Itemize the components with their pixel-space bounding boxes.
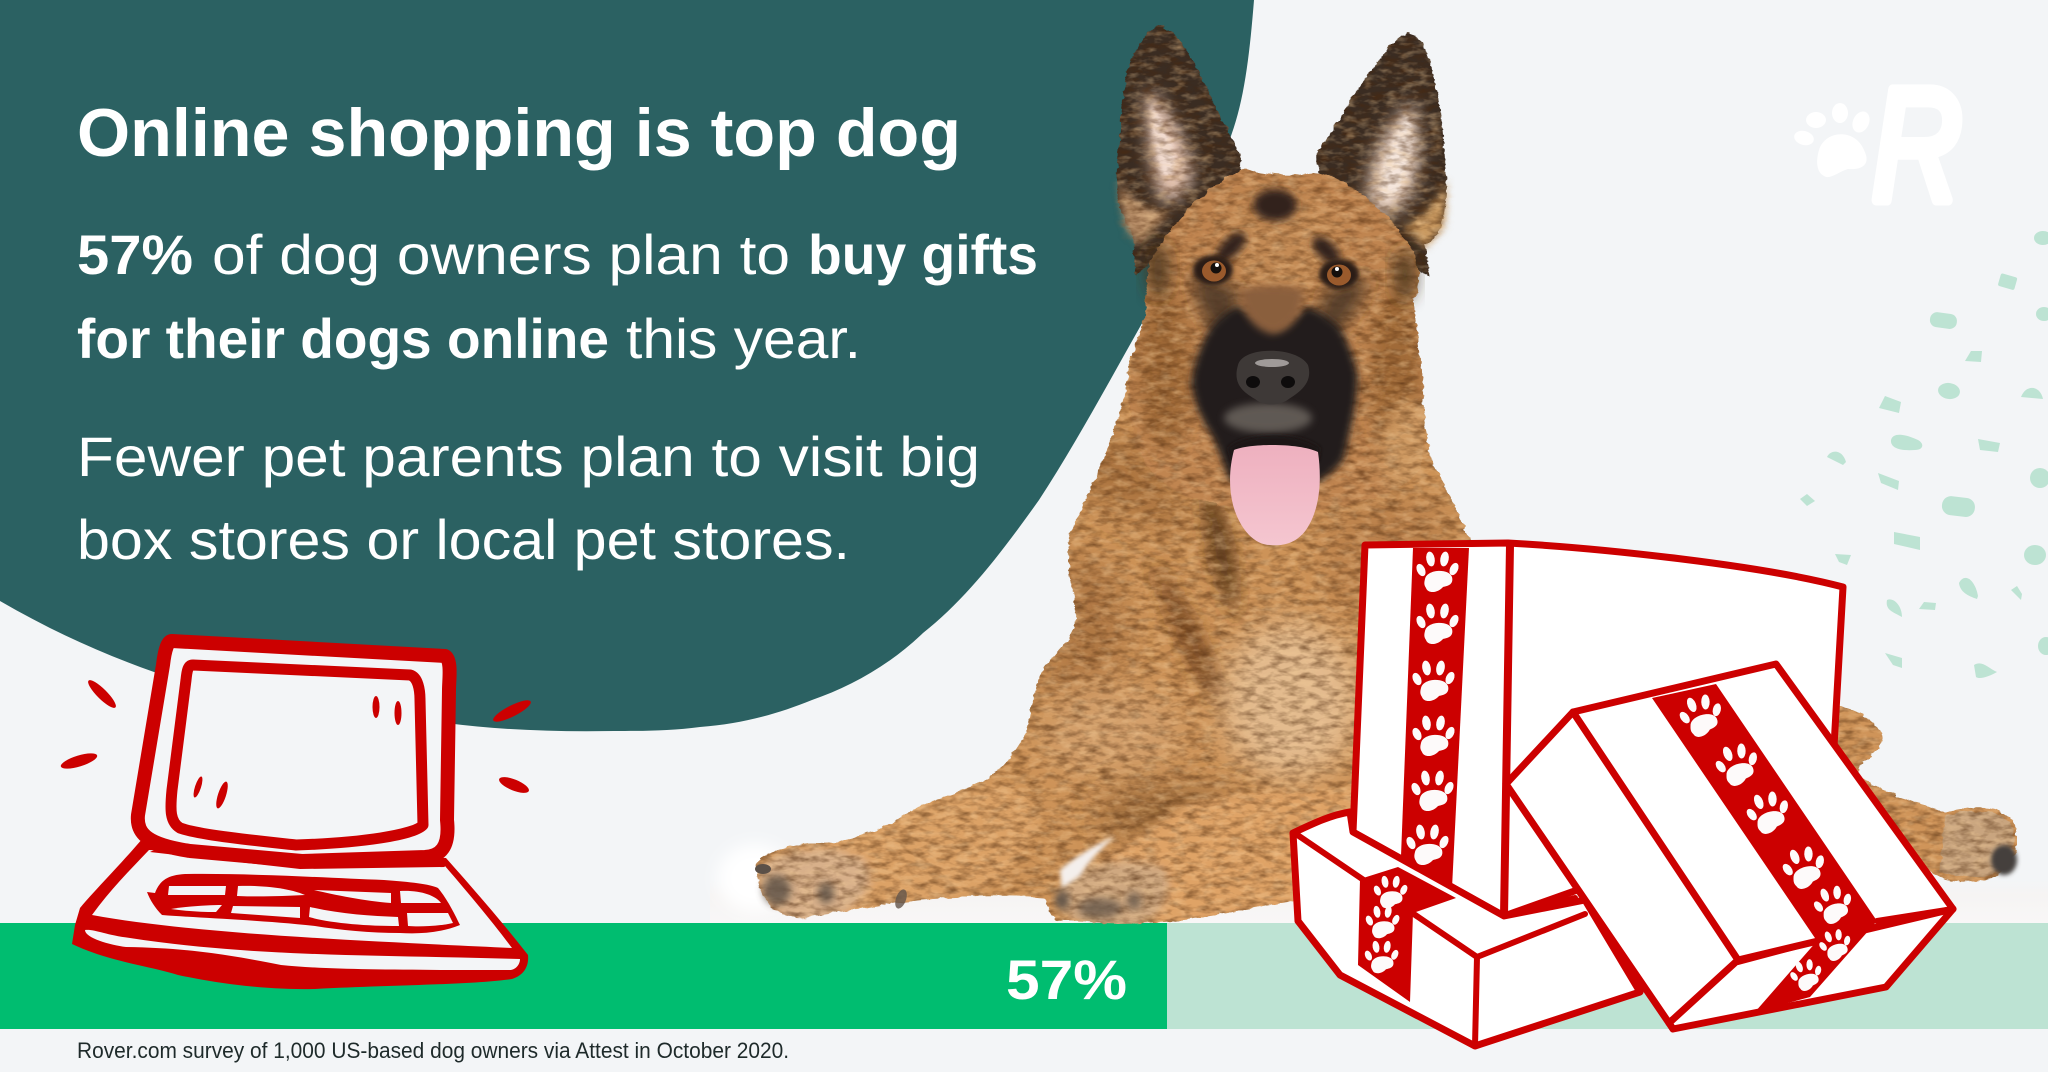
- dog: brown muzzle bridge: [1240, 286, 1304, 334]
- floor behind the dog: [710, 880, 2048, 924]
- dog: body and front legs: [756, 356, 1472, 924]
- text block: 57 percent statement: [77, 223, 1038, 370]
- logo R: R: [1872, 55, 1962, 234]
- laptop icon: [59, 641, 533, 989]
- dog: hind leg and tail: [1830, 705, 2017, 881]
- dog: grey muzzle hairs: [1224, 403, 1312, 433]
- tall box paw prints: [1405, 551, 1460, 865]
- dog: right front leg: [1058, 790, 1352, 930]
- tilted box paw prints: [1675, 691, 1857, 994]
- confetti dots: [1800, 231, 2048, 678]
- dog: left front leg: [758, 784, 1040, 925]
- laptop keyboard: [147, 874, 460, 933]
- dog: gap between legs: [1060, 836, 1115, 888]
- text block: fewer pet parents: Fewer pet parents plan to visit big: [77, 425, 980, 488]
- dog: mouth: [1228, 435, 1320, 462]
- bar label: 57%: 57%: [1006, 948, 1127, 1011]
- tall box ribbon: [1401, 548, 1469, 888]
- laptop screen glints: [192, 696, 402, 810]
- dog: ear inner pale patches: [1118, 90, 1446, 248]
- tilted gift box: [1506, 664, 1953, 1029]
- text block: fewer pet parents: [77, 425, 980, 571]
- text block: 57 percent statement: of dog owners plan to: [212, 223, 790, 286]
- progress bar: background track: [1167, 923, 2048, 1029]
- text block: fewer pet parents: box stores or local pet stores.: [77, 508, 850, 571]
- tilted box ribbon: [1652, 684, 1877, 1012]
- low box ribbon: [1358, 867, 1456, 1002]
- dog: tongue: [1230, 445, 1320, 545]
- text block: 57 percent statement: buy gifts: [808, 223, 1038, 286]
- dog: ears: [1117, 25, 1446, 276]
- logo: paw and R: [1793, 55, 1962, 234]
- laptop hinge: [150, 847, 445, 869]
- dark teal blob panel: [0, 0, 1254, 731]
- dog: furry body, ears and head base: [740, 25, 2017, 930]
- dog: face markings: [1146, 189, 1416, 340]
- dog: eyes: [1193, 255, 1359, 289]
- dog: nose: [1236, 351, 1309, 405]
- laptop spark lines: [59, 677, 533, 796]
- title: Online shopping is top dog: [77, 95, 961, 171]
- text block: 57 percent statement: for their dogs online: [77, 307, 609, 370]
- progress bar: 57 percent fill: [0, 923, 1167, 1029]
- dog photo illustration: [740, 25, 2017, 930]
- text block: 57 percent statement: this year.: [626, 307, 861, 370]
- dog: fur shading: [1036, 420, 1460, 840]
- laptop screen: [171, 665, 423, 845]
- laptop base: [72, 838, 528, 989]
- gift boxes illustration: [1293, 543, 1953, 1046]
- text block: 57 percent statement: 57%: [77, 223, 193, 286]
- dog: black muzzle mask: [1191, 306, 1358, 482]
- dog: toes and claws: [755, 845, 2017, 918]
- white halo near front paw: [717, 844, 793, 912]
- tall gift box: [1353, 543, 1843, 916]
- low box paw prints: [1363, 875, 1409, 973]
- dog: head: [1128, 168, 1425, 510]
- logo paw: [1793, 103, 1873, 177]
- low gift box: [1293, 812, 1640, 1046]
- laptop lid: [138, 641, 450, 861]
- footnote: Rover.com survey of 1,000 US-based dog owners via Attest in October 2020.: [77, 1038, 789, 1063]
